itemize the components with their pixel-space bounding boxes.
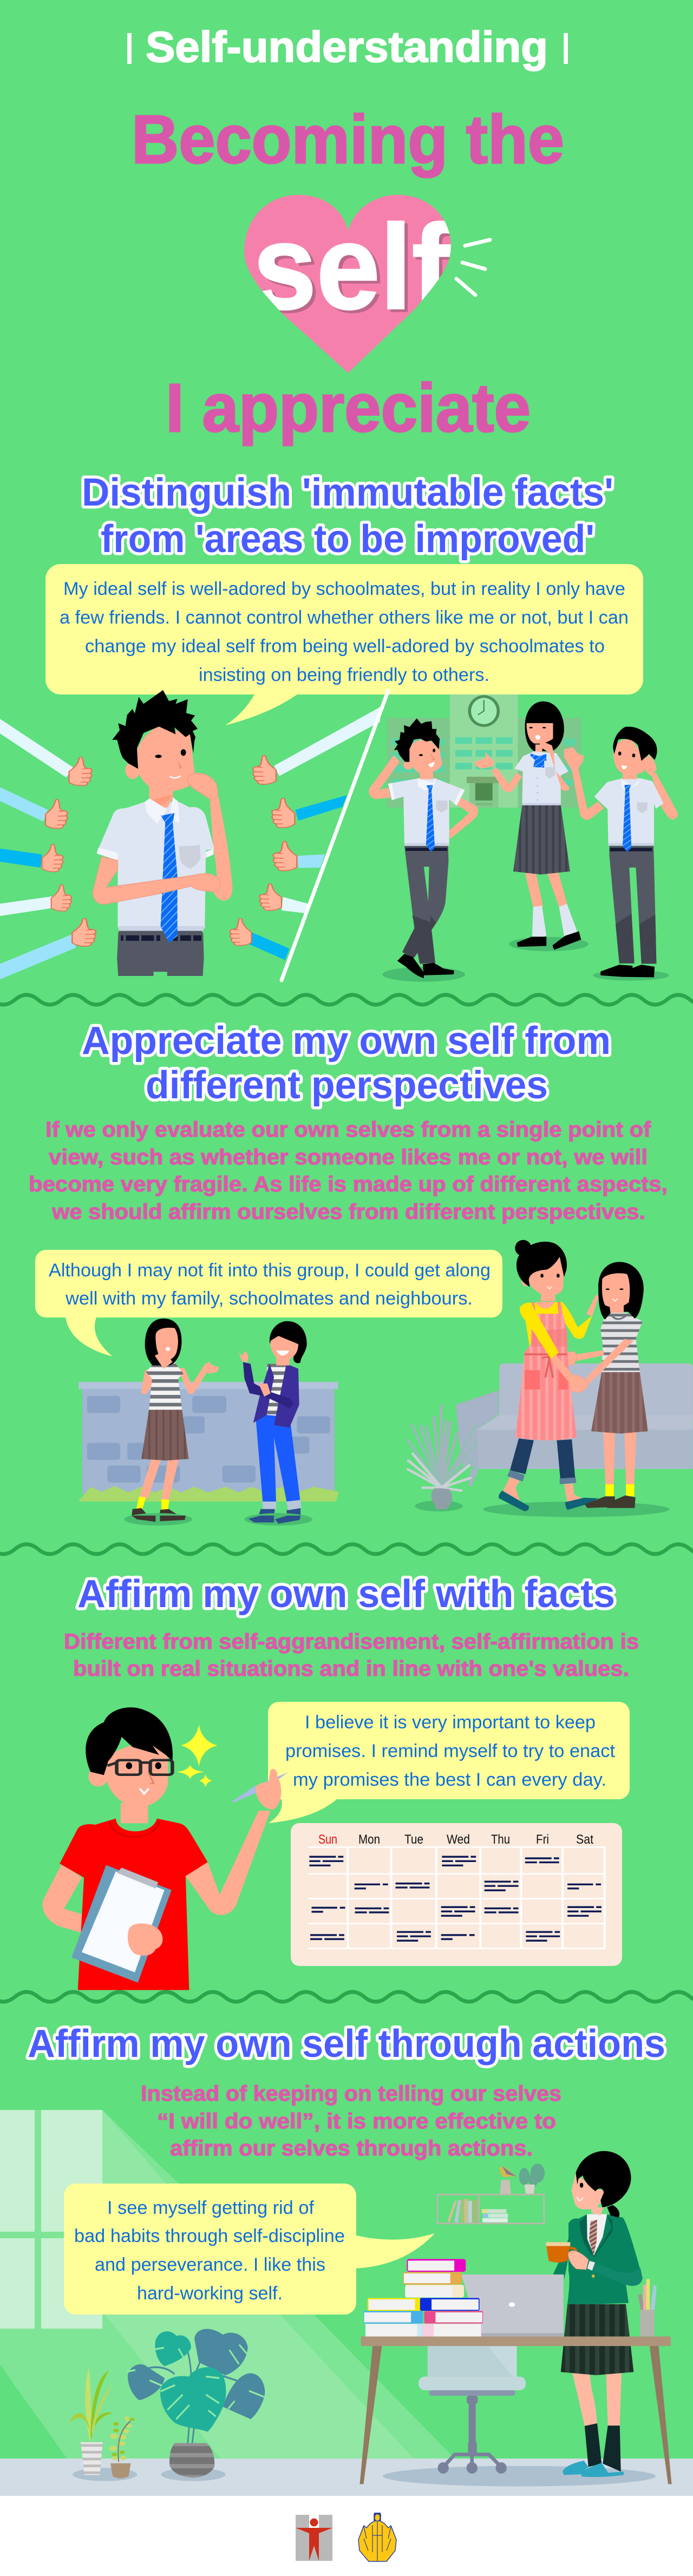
monstera plant <box>128 2329 265 2477</box>
illustration: diagonal divider <box>282 691 388 980</box>
weekday labels: Fri <box>536 1832 549 1847</box>
room background <box>0 2110 693 2496</box>
heading: Affirm my own self through actions <box>28 2022 665 2066</box>
speech bubble: I believe it is very important to keep <box>305 1712 596 1733</box>
illustration: plants <box>68 2329 265 2481</box>
grass plant <box>68 2368 113 2475</box>
speech bubble <box>268 1702 630 1823</box>
student <box>546 2151 643 2477</box>
floor shadow <box>383 2466 656 2486</box>
speech bubble: promises. I remind myself to try to enact <box>285 1741 616 1761</box>
book stacks <box>364 2259 483 2337</box>
illustration: desk scene with student <box>359 2151 672 2486</box>
speech bubble <box>35 1250 502 1356</box>
panel: different perspectives <box>29 1019 693 1525</box>
stone wall <box>78 1382 339 1502</box>
wave divider <box>0 1992 693 2002</box>
speech bubble: a few friends. I cannot control whether others like me or not, but I can <box>60 607 629 628</box>
heading: Affirm my own self with facts <box>77 1572 615 1616</box>
footer strip <box>0 2496 693 2576</box>
description: “I will do well”, it is more effective to <box>157 2109 556 2133</box>
description <box>141 2082 561 2160</box>
series tag: Self-understanding: | <box>561 28 570 64</box>
heading: from 'areas to be improved' <box>101 517 594 561</box>
shelf with ornaments <box>437 2164 545 2224</box>
speech bubble: Although I may not fit into this group, I could get along <box>49 1260 491 1281</box>
wave divider <box>0 995 693 1005</box>
girl laughing <box>475 702 589 951</box>
title line: Becoming the: Becoming the <box>132 101 564 178</box>
wave divider <box>0 1544 693 1554</box>
description: affirm our selves through actions. <box>170 2136 533 2160</box>
description: become very fragile. As life is made up of different aspects, <box>29 1172 668 1196</box>
girl in striped shirt <box>132 1319 219 1516</box>
icon: heart with self: self <box>256 203 454 337</box>
school building <box>387 694 581 808</box>
description <box>29 1118 668 1224</box>
speech bubble: hard-working self. <box>137 2283 283 2304</box>
weekday labels: Thu <box>491 1832 510 1847</box>
mother with apron <box>499 1240 599 1511</box>
description: Instead of keeping on telling our selves <box>141 2082 561 2106</box>
header <box>125 23 570 446</box>
description: built on real situations and in line with one's values. <box>73 1657 629 1681</box>
title line: I appreciate: I appreciate <box>166 370 531 446</box>
speech bubble: bad habits through self-discipline <box>74 2226 345 2246</box>
illustration: home scene with mother and daughter <box>408 1240 693 1517</box>
speech bubble: insisting on being friendly to others. <box>199 665 489 685</box>
illustration: thinking boy <box>93 690 232 976</box>
daughter <box>567 1262 648 1508</box>
potted plant <box>408 1406 477 1511</box>
speech bubble <box>45 564 643 725</box>
pencil cup <box>638 2279 657 2336</box>
girl in purple jacket <box>239 1321 307 1516</box>
speech bubble: change my ideal self from being well-adored by schoolmates to <box>85 636 605 657</box>
heading <box>82 1019 611 1107</box>
illustration: boy with glasses and clipboard <box>43 1707 288 1990</box>
boy scratching head <box>369 718 478 982</box>
panel: affirm through actions <box>0 2022 693 2576</box>
heading <box>82 471 613 561</box>
calendar <box>291 1823 622 1966</box>
illustration: thumbs up hands <box>0 707 380 979</box>
floor shadow <box>483 1502 669 1517</box>
description <box>64 1630 639 1681</box>
speech bubble <box>64 2184 435 2315</box>
icon: heart with self: self <box>253 200 450 335</box>
illustration: school friends <box>369 694 678 982</box>
illustration: girls by wall <box>78 1319 339 1516</box>
description: If we only evaluate our own selves from a single point of <box>45 1118 651 1142</box>
description: Different from self-aggrandisement, self-affirmation is <box>64 1630 639 1654</box>
weekday labels: Mon <box>358 1832 380 1847</box>
speech bubble: and perseverance. I like this <box>95 2254 325 2275</box>
logos <box>296 2513 396 2561</box>
heading: Appreciate my own self from <box>82 1019 611 1063</box>
small leafy plant <box>109 2416 135 2479</box>
heading: Distinguish 'immutable facts' <box>82 471 613 514</box>
weekday labels <box>318 1832 593 1847</box>
boy waving <box>564 727 678 981</box>
speech bubble: My ideal self is well-adored by schoolmates, but in reality I only have <box>63 579 625 599</box>
weekday labels: Tue <box>404 1832 423 1847</box>
logo: cupped hands emblem <box>358 2513 396 2561</box>
speech bubble: my promises the best I can every day. <box>293 1769 606 1790</box>
chair <box>419 2345 526 2474</box>
weekday labels: Wed <box>447 1832 470 1847</box>
sparkles <box>177 1725 218 1787</box>
description: view, such as whether someone likes me or not, we will <box>49 1145 648 1169</box>
speech bubble: I see myself getting rid of <box>107 2198 315 2218</box>
series tag: Self-understanding: | <box>125 28 134 64</box>
heading: different perspectives <box>146 1064 548 1107</box>
logo: Social Welfare emblem <box>296 2515 332 2561</box>
shoes and shadows under the wall girls <box>124 1513 312 1525</box>
desk <box>359 2337 672 2484</box>
panel: immutable facts vs areas to improve <box>0 471 678 982</box>
panel: affirm with facts <box>43 1572 639 1990</box>
description: we should affirm ourselves from different perspectives. <box>51 1200 645 1224</box>
series tag: Self-understanding: Self-understanding <box>146 23 548 71</box>
speech bubble: well with my family, schoolmates and neighbours. <box>65 1288 473 1309</box>
icon: sparkle ticks <box>456 240 490 295</box>
weekday labels: Sat <box>576 1832 593 1847</box>
weekday labels: Sun <box>318 1832 337 1847</box>
laptop <box>461 2275 564 2337</box>
sofa <box>456 1364 693 1487</box>
